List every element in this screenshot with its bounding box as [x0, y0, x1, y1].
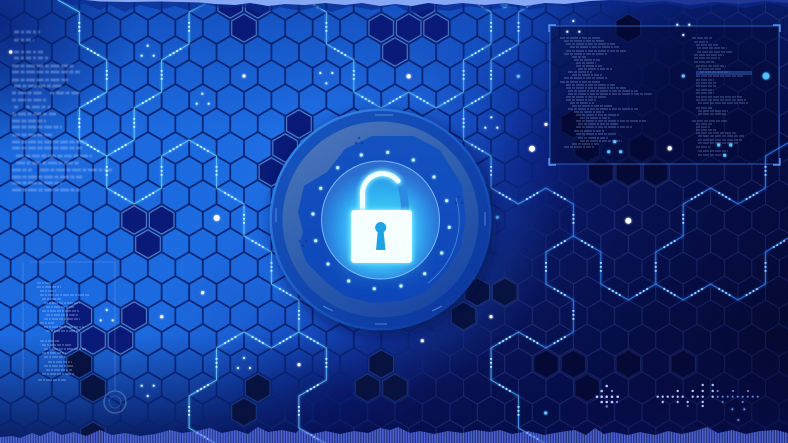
dot matrix display — [597, 385, 758, 406]
top-left data readout — [12, 32, 112, 190]
lock body glow — [350, 209, 413, 264]
gray ring — [282, 122, 478, 318]
lock body — [351, 210, 412, 263]
code panel top right — [549, 25, 780, 165]
outer rim — [270, 108, 492, 330]
notch dots — [300, 138, 462, 246]
shackle dim right leg — [401, 184, 405, 211]
ring of glowing dots — [313, 152, 449, 289]
shackle — [362, 174, 398, 209]
keyhole — [375, 222, 386, 250]
rim tick marks — [276, 115, 485, 324]
badge shadow — [272, 112, 496, 336]
shackle glow — [362, 174, 398, 209]
bottom audio waveform — [0, 427, 788, 443]
rim inner band — [272, 111, 489, 328]
lower-left code readout — [23, 262, 126, 413]
shackle interior tint — [365, 174, 402, 209]
inner ring arc — [428, 198, 459, 283]
circuit zone — [298, 136, 466, 303]
inner disk — [322, 161, 440, 279]
central lock badge — [270, 108, 496, 336]
top jagged waveform edge — [60, 0, 788, 14]
lock glow — [350, 200, 413, 266]
